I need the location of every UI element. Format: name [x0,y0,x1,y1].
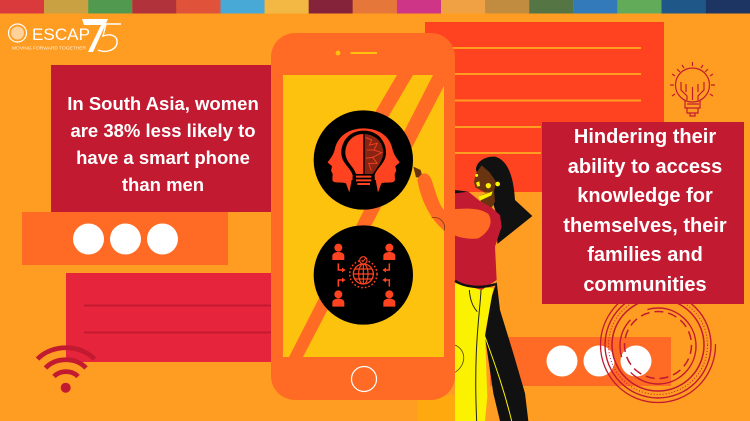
panel: left statement text: than men [122,174,204,195]
icon: light bulb [670,62,715,116]
hair [476,157,532,244]
arm [417,173,491,239]
icon: wifi [38,348,94,393]
far leg [485,282,528,421]
icon: people and globe network [314,225,413,325]
panel: right statement box [542,122,744,304]
icon: concentric rings [600,288,716,402]
panel: lower left red sheet [66,273,273,362]
phone screen stripes [289,75,444,357]
right statement text: ability to access [568,156,722,178]
panel: upper right red-orange sheet [425,22,664,192]
right statement text: communities [583,274,707,296]
right statement text: Hindering their [574,126,716,148]
neck [479,190,495,208]
panel: left statement text: have a smart phone [76,147,250,168]
right statement text: themselves, their [563,215,727,237]
face [474,165,496,193]
ESCAP 75 logo: MOVING FORWARD TOGETHER [12,46,86,50]
ESCAP 75 logo [8,19,121,52]
hand [413,167,423,177]
phone speaker [336,51,377,55]
SDG colour strip [0,0,750,14]
phone screen [283,75,444,357]
panel: left statement box [51,65,273,212]
phone home button [352,366,376,392]
phone [271,33,455,400]
right statement text [563,126,727,296]
right statement text: knowledge for [577,185,713,207]
illustration: woman [413,157,532,421]
shirt [455,192,502,290]
ESCAP 75 logo: ESCAP [32,25,90,44]
right statement text: families and [587,244,703,266]
panel: left statement text: are 38% less likely to [70,120,256,141]
icon: heads and bulb [314,110,413,210]
panel: right orange dots bar [490,337,671,386]
lower right darker background band [418,395,455,421]
near leg [455,283,493,421]
panel: left statement text [67,93,259,195]
panel: left statement text: In South Asia, women [67,93,259,114]
panel: left orange dots bar [22,212,228,265]
